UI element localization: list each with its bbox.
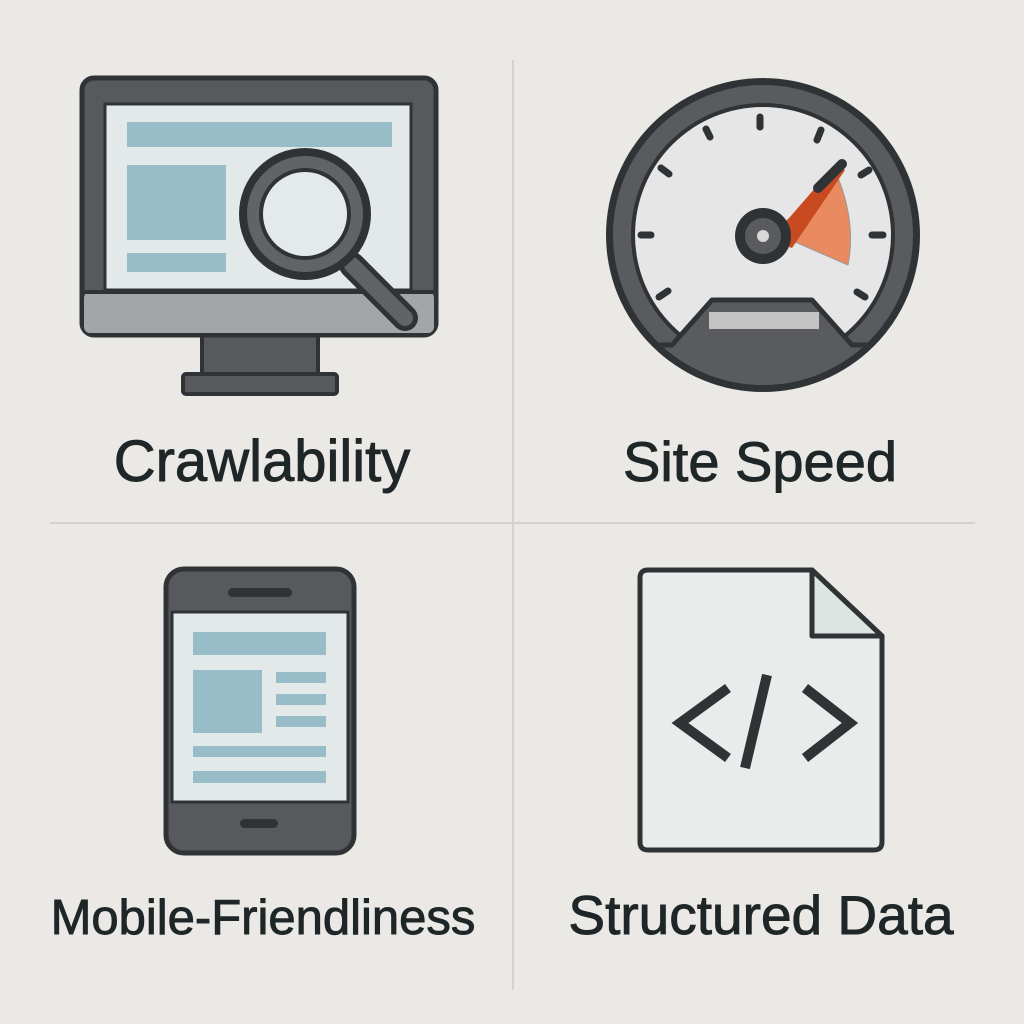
heading: Mobile-Friendliness: Mobile-Friendliness: [51, 891, 475, 945]
heading: Crawlability: Crawlability: [114, 429, 410, 494]
panel: crawlability: [82, 78, 436, 494]
panel: structured data: [568, 570, 954, 946]
icon: speedometer: [606, 78, 920, 392]
heading: Structured Data: Structured Data: [568, 884, 954, 946]
panel: site speed: [600, 78, 930, 493]
panel: mobile-friendliness: [51, 569, 475, 945]
icon: monitor with magnifier: [82, 78, 436, 394]
icon: code document: [640, 570, 882, 850]
icon: smartphone: [166, 569, 354, 853]
heading: Site Speed: Site Speed: [623, 430, 897, 493]
